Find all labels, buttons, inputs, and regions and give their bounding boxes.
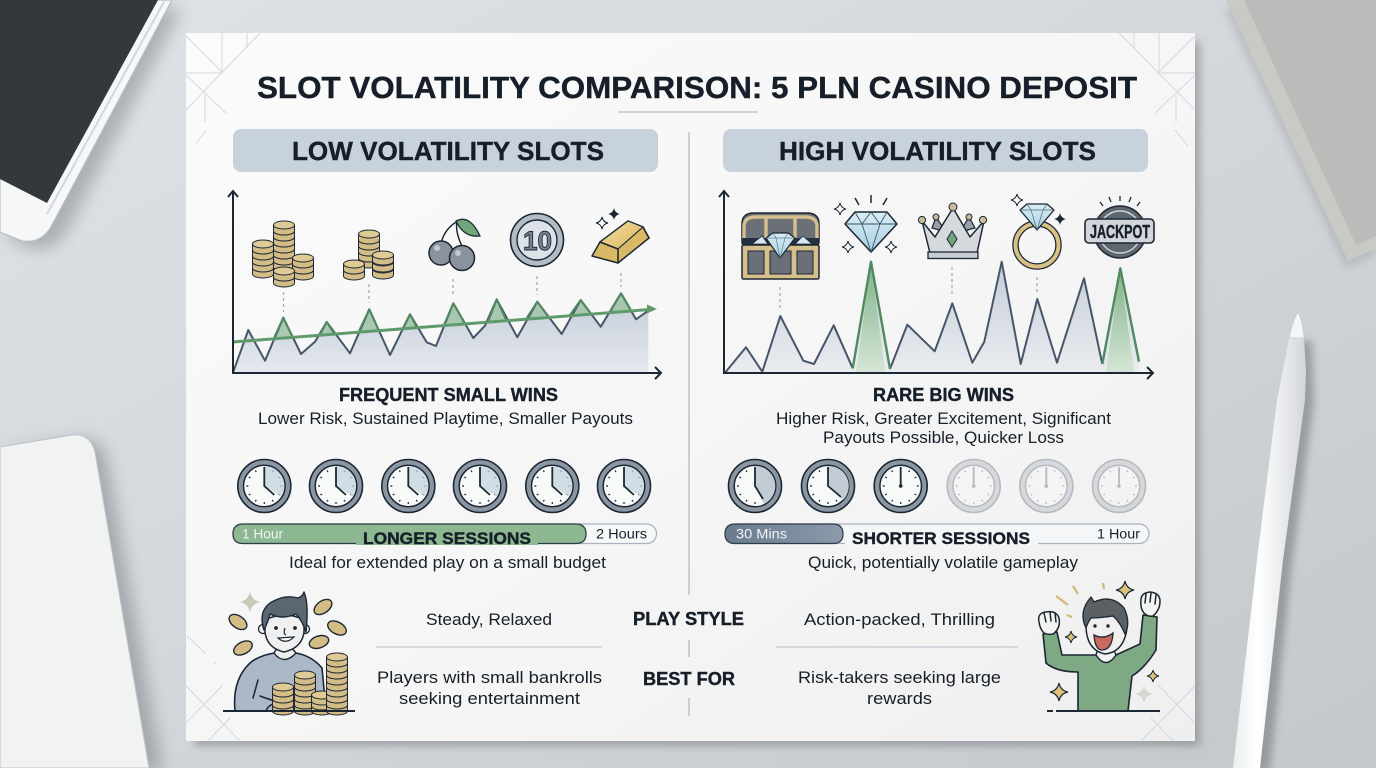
icon: diamond — [834, 195, 897, 253]
icon: 10 coin — [510, 214, 564, 266]
center divider — [688, 132, 690, 716]
icon: crown — [918, 203, 987, 258]
paper shadow — [194, 42, 1200, 746]
clocks: three filled, three faded — [728, 460, 1146, 512]
text: quick gameplay note: Quick, potentially volatile gameplay — [808, 553, 1079, 572]
icon: cherries — [429, 219, 480, 270]
session bar: shorter sessions: 1 Hour — [1097, 526, 1141, 542]
text: high risk traits — [776, 409, 1111, 447]
text: extended play note: Ideal for extended play on a small budget — [289, 553, 606, 572]
title: SLOT VOLATILITY COMPARISON: 5 PLN CASINO DEPOSIT — [257, 70, 1137, 105]
icon: large coin stacks — [252, 221, 314, 287]
text: low best for — [377, 668, 602, 708]
row label: best for: BEST FOR — [643, 669, 735, 689]
text: low best for: Players with small bankrolls — [377, 668, 602, 687]
session bar: longer sessions — [233, 524, 656, 548]
heading: high volatility: HIGH VOLATILITY SLOTS — [779, 136, 1096, 166]
session bar: longer sessions: 1 Hour — [242, 526, 283, 542]
session bar: longer sessions: LONGER SESSIONS — [363, 529, 531, 548]
clocks: six filled — [238, 460, 650, 512]
text: high best for: Risk-takers seeking large — [798, 668, 1001, 687]
stylus pen — [1233, 312, 1314, 768]
text: high risk traits: Payouts Possible, Quicker Loss — [823, 428, 1064, 447]
text: low best for: seeking entertainment — [399, 689, 580, 708]
icon: jackpot badge — [1085, 196, 1154, 258]
text: high best for: rewards — [867, 689, 932, 708]
session bar: shorter sessions: SHORTER SESSIONS — [852, 529, 1030, 548]
infographic paper — [186, 33, 1195, 741]
session bar: shorter sessions — [725, 524, 1149, 548]
panel: high volatility slots — [719, 129, 1160, 711]
subheading: frequent small wins: FREQUENT SMALL WINS — [339, 385, 558, 405]
phone on desk — [0, 0, 182, 249]
notebook on desk — [1224, 0, 1376, 269]
icon: diamond ring — [1011, 194, 1066, 266]
session bar: shorter sessions: 30 Mins — [736, 526, 787, 542]
text: low risk traits: Lower Risk, Sustained Playtime, Smaller Payouts — [258, 409, 633, 428]
tablet on desk — [0, 435, 163, 768]
subheading: rare big wins: RARE BIG WINS — [873, 385, 1014, 405]
illustration: relaxed player with coins — [223, 592, 355, 715]
chart: rare big wins — [719, 191, 1153, 379]
panel: low volatility slots — [223, 129, 661, 715]
icon: 10 coin: 10 — [523, 226, 552, 256]
icon: gold bar — [592, 208, 649, 263]
text: high best for — [798, 668, 1001, 708]
illustration: excited player cheering — [1039, 581, 1160, 711]
heading: low volatility — [233, 129, 658, 172]
text: high risk traits: Higher Risk, Greater Excitement, Significant — [776, 409, 1111, 428]
session bar: longer sessions: 2 Hours — [596, 526, 647, 542]
icon: treasure chest — [742, 213, 819, 279]
chart: frequent small wins — [228, 191, 661, 379]
icon: small coin stacks — [344, 230, 394, 280]
heading: high volatility — [723, 129, 1148, 172]
icon: jackpot badge: JACKPOT — [1090, 222, 1150, 242]
text: low play style: Steady, Relaxed — [426, 610, 552, 629]
heading: low volatility: LOW VOLATILITY SLOTS — [292, 136, 604, 166]
row label: play style: PLAY STYLE — [633, 609, 744, 629]
text: high play style: Action-packed, Thrilling — [804, 610, 995, 629]
